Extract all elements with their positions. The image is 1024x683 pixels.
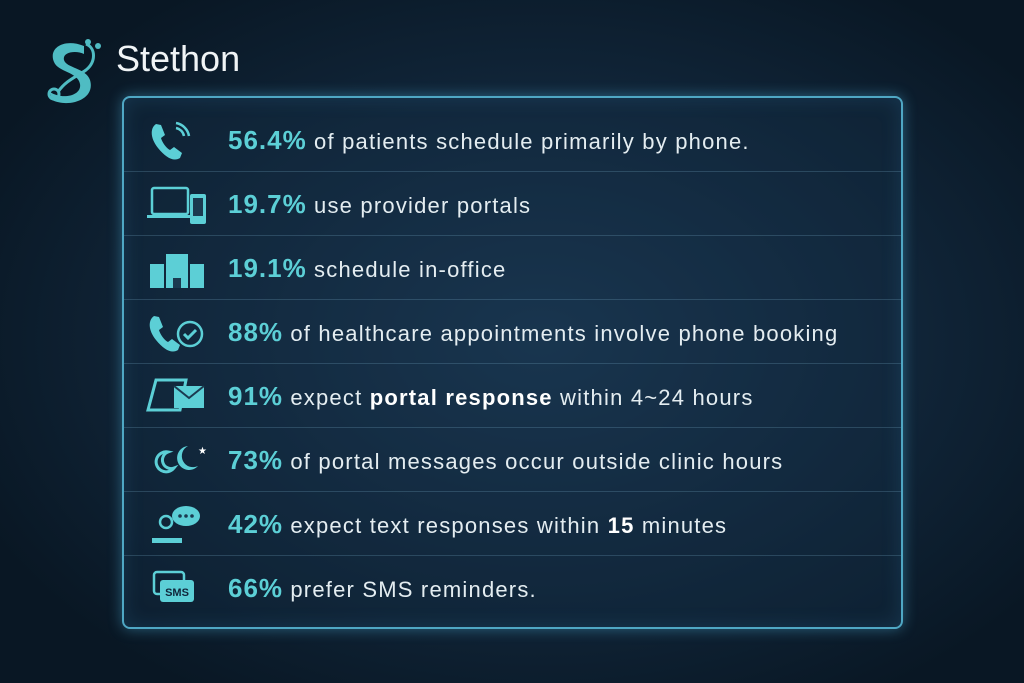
row 8: sms: SMS xyxy=(165,587,189,599)
row 8: sms: 66% prefer SMS reminders. xyxy=(228,573,537,603)
row 3: building xyxy=(124,236,901,300)
row 6: moon: ★ xyxy=(198,446,207,457)
row 5: portal mail: 91% expect portal response within 4~24 hours xyxy=(228,381,754,411)
row 1: phone: 56.4% of patients schedule primarily by phone. xyxy=(228,125,750,155)
row 6: moon: 73% of portal messages occur outside clinic hours xyxy=(228,445,783,475)
row 3: building: 19.1% schedule in-office xyxy=(228,253,506,283)
logo xyxy=(48,38,240,104)
row 5: portal mail xyxy=(124,364,901,428)
row 1: phone xyxy=(124,108,901,172)
row 7: chat xyxy=(124,492,901,556)
logo: Stethon xyxy=(116,38,240,79)
row 4: phone check: 88% of healthcare appointments involve phone booking xyxy=(228,317,838,347)
row 2: devices xyxy=(124,172,901,236)
panel: stats list xyxy=(122,96,903,629)
row 4: phone check xyxy=(124,300,901,364)
row 6: moon xyxy=(124,428,901,492)
row 7: chat: 42% expect text responses within 15 minutes xyxy=(228,509,727,539)
row 2: devices: 19.7% use provider portals xyxy=(228,189,531,219)
